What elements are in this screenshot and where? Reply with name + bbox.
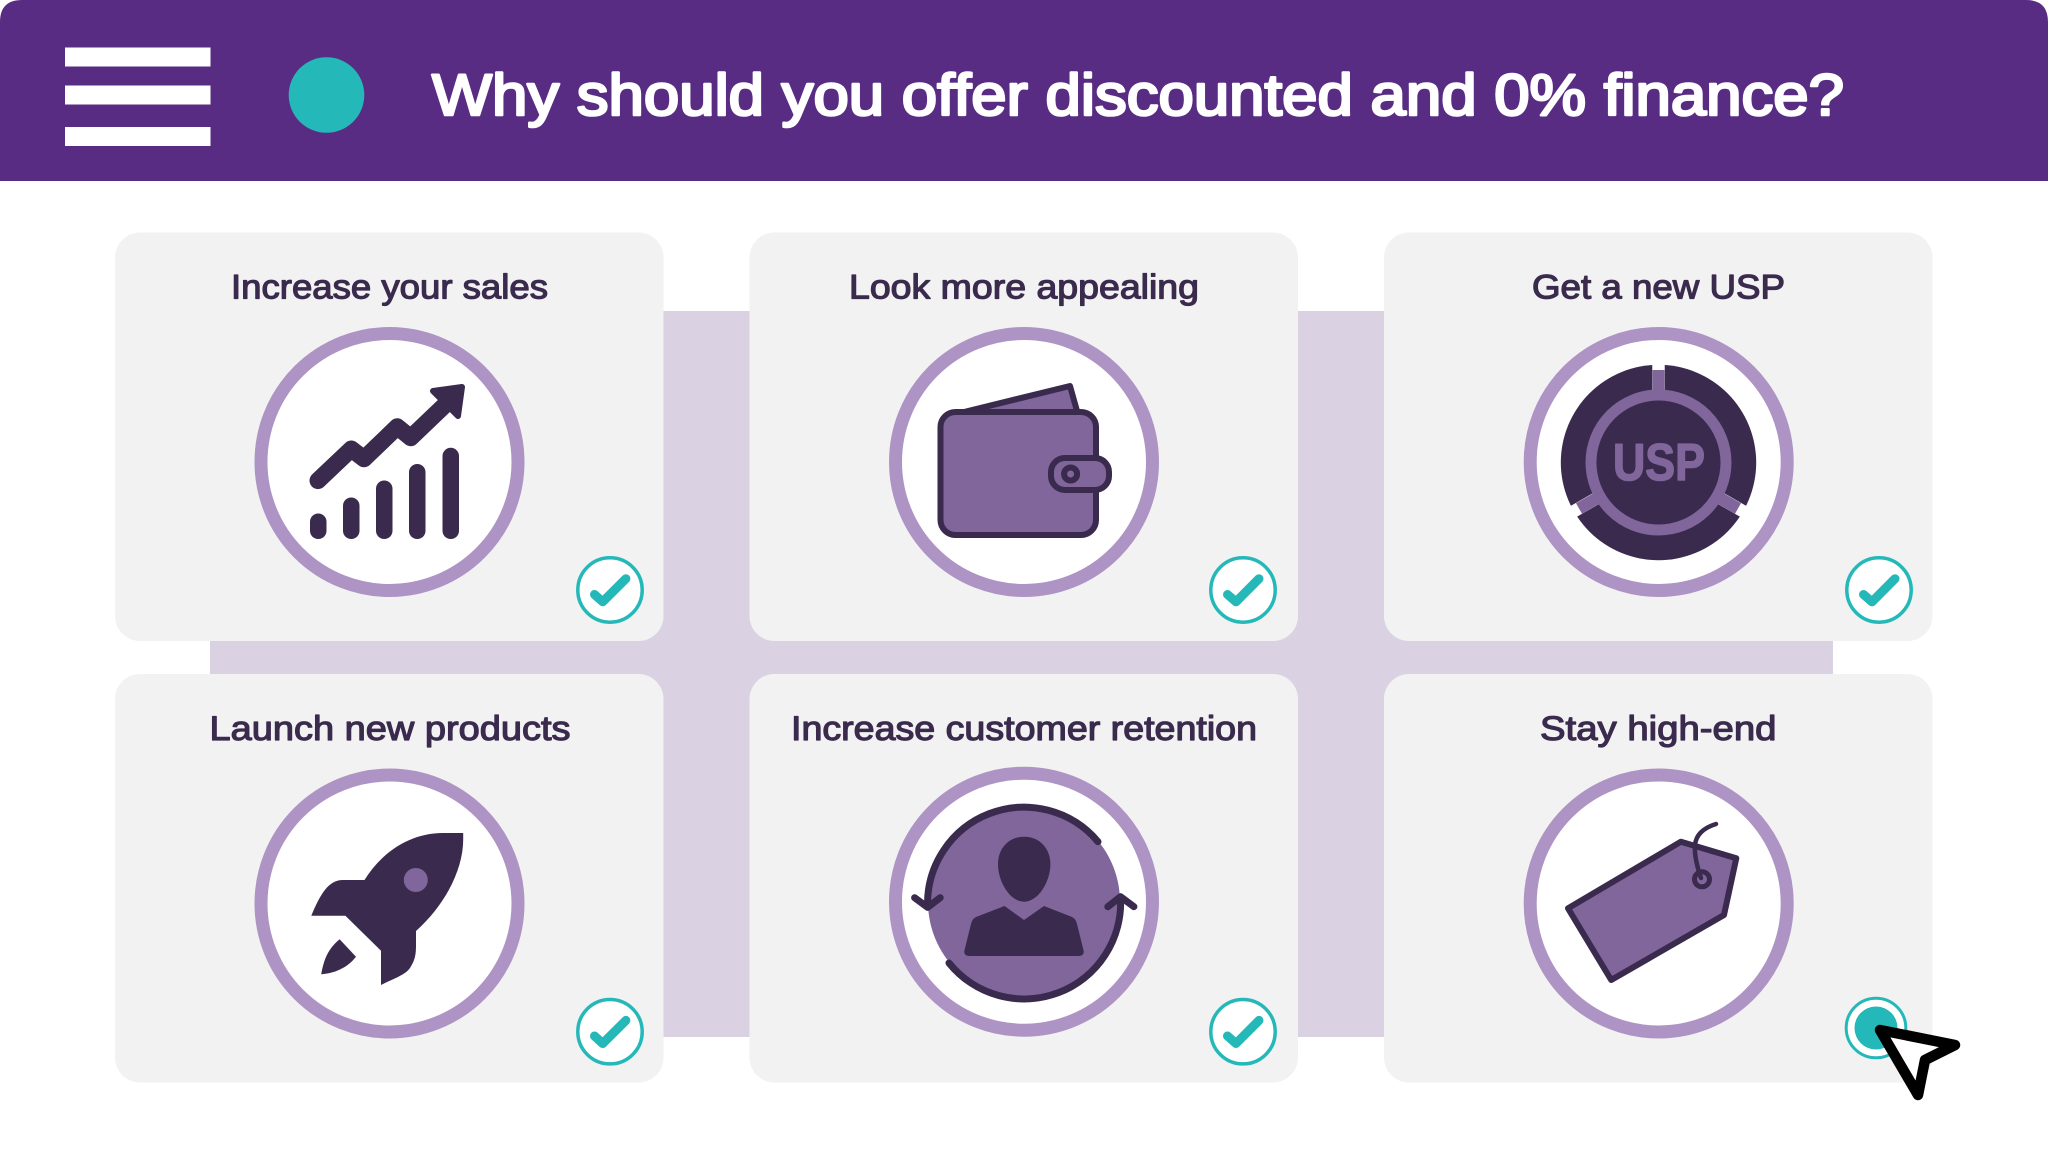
panel: stay high-end (1384, 674, 1932, 1082)
icon: price tag (1568, 824, 1736, 980)
header bar (0, 0, 2048, 181)
icon: selected radio (1846, 998, 1906, 1058)
panel: increase customer retention (750, 674, 1298, 1082)
icon: mouse cursor (1880, 1030, 1955, 1095)
heading: look more appealing: Look more appealing (849, 268, 1199, 306)
icon: wallet (940, 386, 1109, 535)
icon ring (1530, 775, 1787, 1032)
heading: increase your sales: Increase your sales (231, 268, 548, 306)
icon ring (1530, 334, 1787, 590)
icon: check badge (578, 999, 642, 1064)
panel: increase your sales (115, 232, 664, 641)
icon ring (896, 773, 1152, 1030)
panel: look more appealing (750, 232, 1298, 641)
icon: USP badge (1561, 355, 1756, 560)
heading: increase customer retention: Increase customer retention (791, 710, 1257, 748)
title: Why should you offer discounted and 0% finance? (432, 63, 1844, 128)
heading: launch new products: Launch new products (210, 710, 570, 748)
icon ring (261, 775, 518, 1032)
icon: check badge (578, 558, 642, 622)
icon ring (261, 334, 518, 590)
heading: get a new USP: Get a new USP (1532, 268, 1785, 306)
icon: customer with cycle arrows (915, 806, 1134, 999)
USP text: USP (1613, 434, 1705, 492)
icon: check badge (1211, 999, 1275, 1064)
icon ring (896, 334, 1152, 590)
icon: teal dot (289, 57, 364, 133)
icon: check badge (1211, 558, 1275, 622)
icon: check badge (1847, 558, 1911, 622)
heading: stay high-end: Stay high-end (1540, 710, 1776, 748)
panel: get a new USP (1384, 232, 1932, 641)
panel: launch new products (115, 674, 664, 1082)
icon: rocket (311, 833, 463, 985)
background cross panel (210, 311, 1833, 1037)
icon: hamburger menu (65, 48, 210, 146)
icon: growth chart (310, 387, 462, 539)
